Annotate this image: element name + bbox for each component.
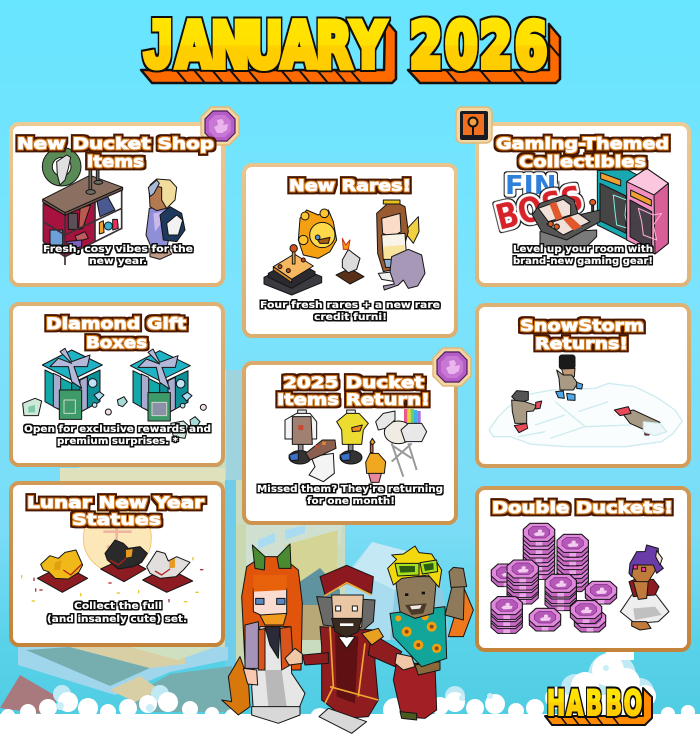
illustration: shelf, wreath and avatar bbox=[42, 147, 185, 265]
lilac elephant bbox=[383, 249, 425, 290]
coin single front bbox=[529, 608, 561, 631]
logo extruded shadow bbox=[545, 688, 652, 725]
title extruded shadow: January bbox=[141, 19, 396, 83]
coin stack front left bbox=[491, 597, 522, 633]
characters: three hotel avatars bbox=[222, 544, 473, 733]
caption: new year. bbox=[89, 256, 147, 267]
ducket badge bbox=[201, 107, 239, 145]
illustration: gaming collectibles bbox=[492, 168, 668, 254]
loose diamonds and pearls bbox=[23, 397, 206, 438]
panel frame bbox=[244, 165, 456, 336]
gaming collectible badge bbox=[456, 107, 492, 143]
heading: Boxes bbox=[86, 333, 147, 352]
flame statue bbox=[336, 238, 364, 284]
heading: Lunar New Year bbox=[27, 493, 204, 512]
illustration: horse statues bbox=[21, 504, 203, 602]
rainbow cloud chair bbox=[376, 409, 427, 477]
heading: SnowStorm bbox=[520, 316, 644, 335]
final boss sign: BOSS bbox=[492, 179, 587, 239]
title: January 2026 bbox=[141, 6, 560, 83]
caption: Collect the full bbox=[74, 601, 162, 612]
coin stack left bbox=[491, 564, 523, 587]
illustration: gift boxes and diamonds bbox=[23, 348, 206, 438]
avatar: orange haired lady bbox=[222, 544, 305, 723]
heading: Double Duckets! bbox=[492, 498, 673, 517]
heading bbox=[17, 134, 214, 171]
caption: Four fresh rares + a new rare bbox=[260, 300, 440, 311]
player lying in the snow bbox=[614, 407, 667, 436]
caption bbox=[24, 424, 211, 447]
heading bbox=[277, 373, 430, 409]
coin stack middle left bbox=[507, 560, 538, 604]
caption: Open for exclusive rewards and bbox=[24, 424, 211, 435]
panel: Lunar New Year Statues bbox=[11, 483, 223, 645]
caption bbox=[43, 244, 193, 267]
mannequin with vest bbox=[285, 410, 317, 464]
wreath bbox=[42, 147, 81, 186]
confetti bbox=[21, 557, 203, 602]
title extruded shadow: 2026 bbox=[408, 24, 560, 83]
ducket badge bbox=[433, 348, 471, 386]
caption: (and insanely cute) set. bbox=[47, 614, 187, 625]
gold joystick on dark base bbox=[264, 245, 322, 295]
heading: Gaming-Themed bbox=[496, 134, 669, 153]
heading: New Rares! bbox=[289, 176, 411, 195]
panel frame bbox=[11, 483, 223, 645]
logo wordmark: HABBO bbox=[547, 683, 642, 723]
black horse bbox=[101, 540, 147, 582]
heading: Returns! bbox=[535, 334, 628, 353]
panel frame bbox=[244, 363, 456, 523]
heading: Items Return! bbox=[277, 390, 430, 409]
heading bbox=[46, 314, 186, 352]
panel frame bbox=[477, 488, 689, 650]
panel: 2025 Ducket Items Return bbox=[244, 348, 471, 523]
coin stack back right bbox=[557, 534, 588, 592]
heading: Collectibles bbox=[519, 152, 646, 171]
title word: January: JANUARY bbox=[144, 6, 386, 82]
illustration: rare furni and avatar bbox=[264, 200, 425, 295]
white horse bbox=[143, 551, 193, 592]
panel: New Rares bbox=[244, 165, 456, 336]
title word: 2026: 2026 bbox=[410, 9, 547, 82]
gift box two bbox=[130, 349, 192, 421]
heading: New Ducket Shop bbox=[17, 134, 214, 153]
illustration: ducket coin stacks bbox=[491, 523, 669, 633]
heading: Statues bbox=[72, 510, 161, 529]
player with black hat bbox=[556, 355, 583, 400]
caption: credit furni! bbox=[314, 312, 387, 323]
coin stack middle bbox=[545, 574, 576, 611]
panel: New Ducket Shop items bbox=[11, 107, 239, 285]
coin single right bbox=[585, 581, 617, 604]
clouds along the bottom bbox=[0, 649, 700, 740]
coin pair front right bbox=[570, 601, 606, 632]
panel frame bbox=[11, 304, 223, 465]
gaming chair bbox=[532, 195, 600, 250]
gift box one bbox=[42, 348, 104, 419]
avatar: sunglasses guest bbox=[388, 546, 473, 720]
caption bbox=[47, 601, 187, 625]
coin stack back centre bbox=[523, 523, 555, 579]
avatar in white skirt bbox=[620, 545, 669, 630]
golden duck lion bbox=[298, 209, 337, 258]
white trousers and beret bbox=[306, 440, 336, 482]
caption bbox=[260, 300, 440, 323]
final boss sign: FINAL bbox=[505, 171, 595, 201]
panel: Gaming-Themed Collectibles bbox=[456, 107, 689, 285]
avatar: hotel manager bbox=[285, 565, 415, 733]
player on the left bbox=[512, 391, 542, 433]
caption bbox=[257, 484, 443, 507]
panel frame bbox=[11, 124, 223, 285]
heading: 2025 Ducket bbox=[283, 373, 424, 392]
snow mound bbox=[489, 383, 682, 447]
heading bbox=[27, 493, 204, 529]
caption: brand-new gaming gear! bbox=[513, 256, 653, 267]
panel: Double Duckets bbox=[477, 488, 689, 650]
caption bbox=[513, 244, 653, 267]
avatar with penguin backpack bbox=[146, 179, 185, 259]
caption: for one month! bbox=[307, 496, 395, 507]
illustration: returning ducket items bbox=[285, 409, 427, 482]
fairy wings bbox=[404, 217, 419, 243]
logo: Habbo bbox=[545, 683, 652, 725]
panel: Diamond Gift Boxes bbox=[11, 304, 223, 465]
teal toy box bbox=[597, 169, 637, 239]
avatar girl bbox=[377, 200, 408, 282]
pink toy box bbox=[627, 168, 668, 254]
caption: Fresh, cosy vibes for the bbox=[43, 244, 193, 255]
panel frame bbox=[477, 124, 689, 285]
illustration: snowball fight bbox=[489, 355, 682, 447]
faint sun medallion bbox=[83, 504, 151, 572]
heading: Diamond Gift bbox=[46, 314, 186, 333]
duck cupcake bbox=[366, 438, 386, 482]
heading bbox=[520, 316, 644, 353]
panel frame bbox=[477, 305, 689, 466]
caption: premium surprises. * bbox=[57, 436, 179, 447]
heading bbox=[496, 134, 669, 171]
caption: Level up your room with bbox=[513, 244, 653, 255]
gold horse bbox=[37, 550, 88, 592]
background: hotel building and mountain bbox=[0, 370, 450, 716]
bookshelf bbox=[43, 168, 123, 265]
heading: items bbox=[87, 152, 144, 171]
caption: Missed them? They're returning bbox=[257, 484, 443, 495]
panel: SnowStorm Returns bbox=[477, 305, 689, 466]
yellow duck shirt bbox=[337, 410, 368, 464]
